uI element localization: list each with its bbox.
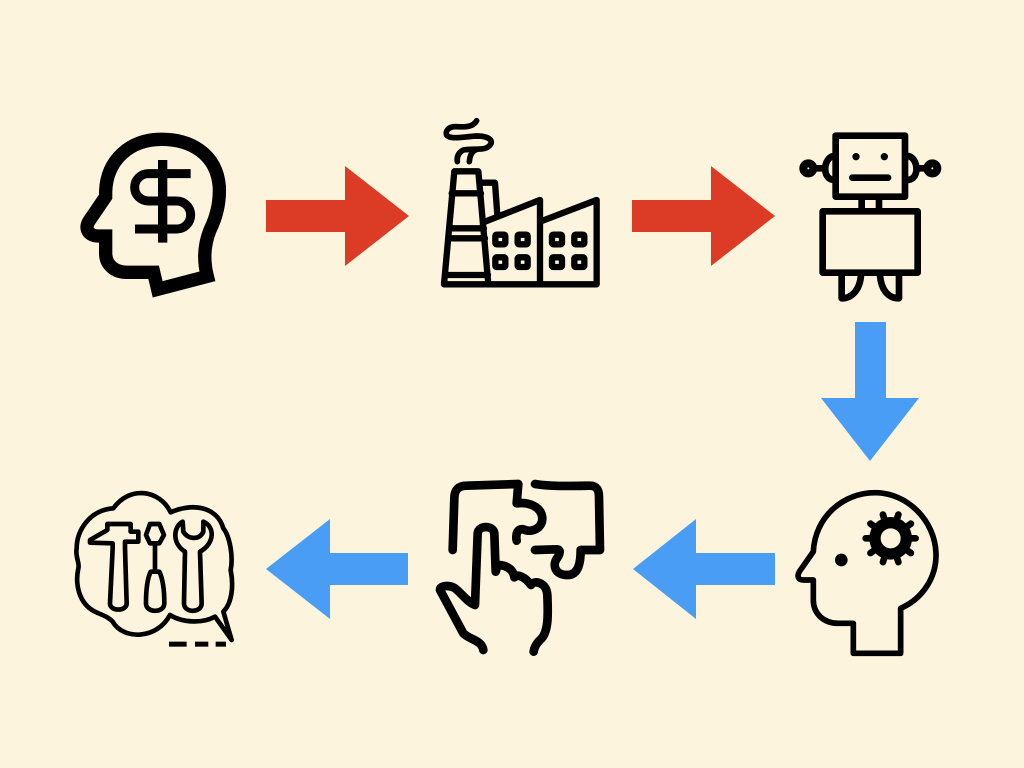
- icon: robot: [803, 136, 937, 298]
- arrow: blue left 1: [633, 519, 775, 619]
- arrow: blue down: [821, 322, 919, 461]
- icon: head with dollar sign: [87, 139, 219, 289]
- icon: tools in speech bubble: [76, 493, 232, 647]
- icon: head with gear: [798, 493, 936, 653]
- arrow: red right 2: [632, 166, 775, 266]
- arrow: red right 1: [266, 166, 409, 266]
- icon: factory: [444, 121, 597, 284]
- arrow: blue left 2: [266, 519, 408, 619]
- icon: hand touching puzzle: [440, 484, 600, 652]
